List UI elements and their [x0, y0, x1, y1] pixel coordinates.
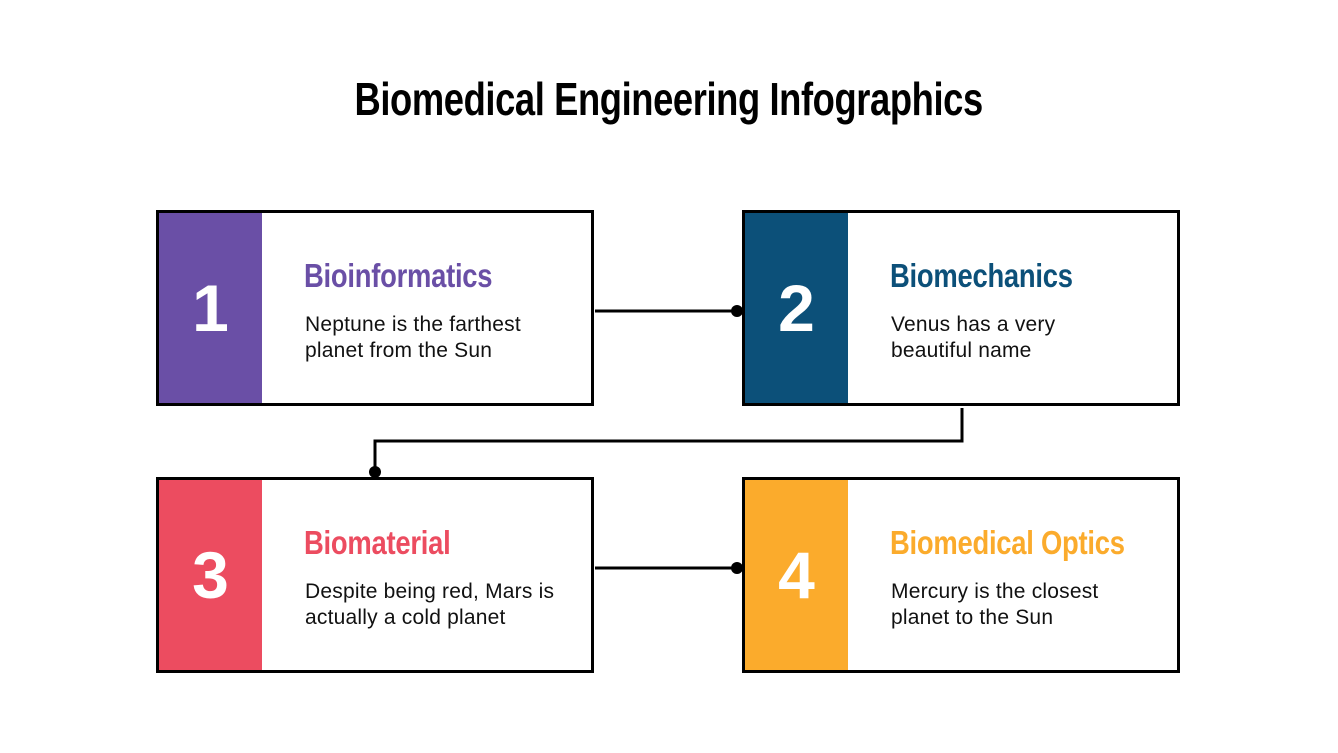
text 3: actually a cold planet: [305, 606, 506, 629]
panel 2: [742, 210, 1180, 406]
text 1: planet from the Sun: [305, 339, 492, 362]
panel 1: [156, 210, 594, 406]
text 1: Neptune is the farthest: [305, 313, 521, 336]
text 3: Despite being red, Mars is: [305, 580, 554, 603]
heading 1: Bioinformatics: [304, 257, 492, 294]
number block 1: 1: [192, 271, 229, 345]
text 2: [891, 313, 1055, 362]
text 2: beautiful name: [891, 339, 1032, 362]
panel 3: [156, 477, 594, 673]
number block 3: 3: [192, 538, 229, 612]
number block 4: [745, 480, 848, 670]
number block 4: 4: [778, 538, 815, 612]
text 1: [305, 313, 521, 362]
heading 2: Biomechanics: [890, 257, 1073, 294]
number block 2: 2: [778, 271, 815, 345]
text 4: Mercury is the closest: [891, 580, 1098, 603]
title: Biomedical Engineering Infographics: [355, 73, 983, 125]
text 4: [891, 580, 1098, 629]
text 4: planet to the Sun: [891, 606, 1053, 629]
heading 3: Biomaterial: [304, 524, 450, 561]
number block 2: [745, 213, 848, 403]
text 3: [305, 580, 554, 629]
number block 1: [159, 213, 262, 403]
heading 4: Biomedical Optics: [890, 524, 1125, 561]
text 2: Venus has a very: [891, 313, 1055, 336]
number block 3: [159, 480, 262, 670]
panel 4: [742, 477, 1180, 673]
